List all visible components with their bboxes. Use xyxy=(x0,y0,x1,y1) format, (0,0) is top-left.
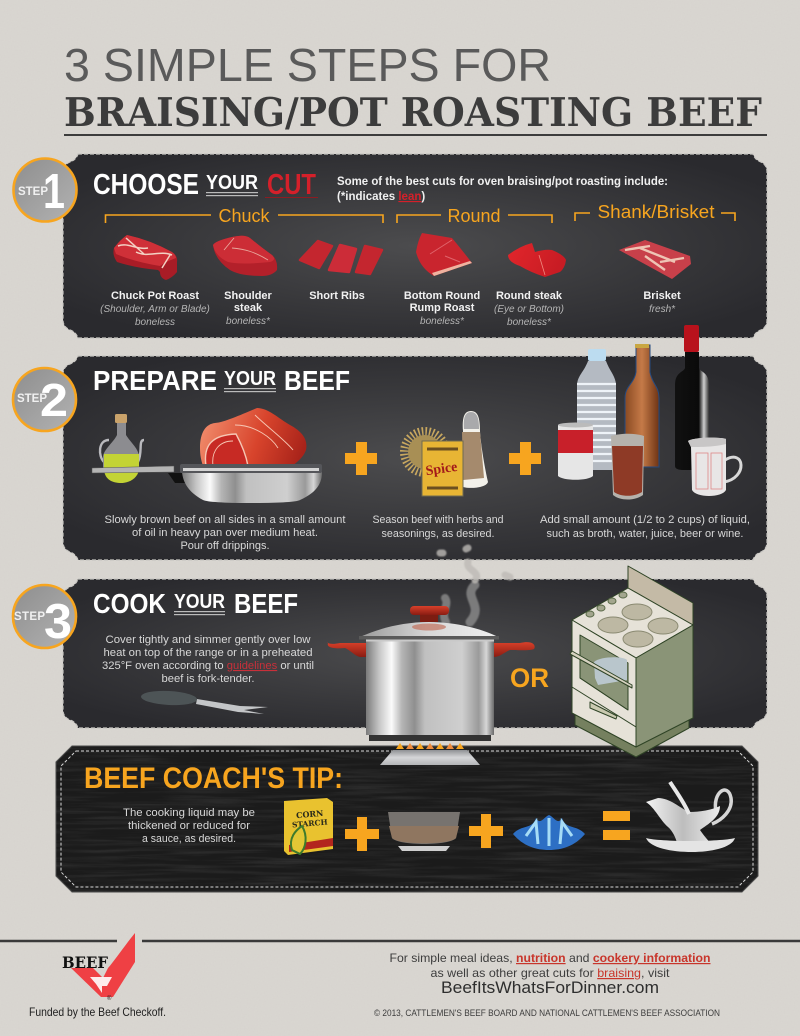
icon: gravy boat xyxy=(646,782,735,852)
icon: spice tin and shaker xyxy=(405,411,488,496)
cut labels: Chuck Pot Roast xyxy=(111,290,199,302)
icon: corn starch box: CORN xyxy=(296,808,324,820)
icon: roast in skillet xyxy=(92,408,322,503)
text: add liquid xyxy=(540,514,750,540)
cut labels: Shoulder xyxy=(224,290,273,302)
bracket: round xyxy=(397,206,552,226)
icon: stock pot on burner xyxy=(327,606,535,765)
text: brown beef: Pour off drippings. xyxy=(180,540,270,552)
footer text: © 2013, CATTLEMEN'S BEEF BOARD AND NATIONAL CATTLEMEN'S BEEF ASSOCIATION xyxy=(374,1008,720,1019)
bracket: chuck xyxy=(106,206,383,226)
plus sign xyxy=(345,817,379,851)
cut labels: boneless* xyxy=(507,317,552,328)
bracket: chuck: Chuck xyxy=(218,206,271,226)
icon: bowl of liquid xyxy=(388,812,460,851)
cut labels xyxy=(100,290,681,328)
logo: beef check: BEEF xyxy=(62,953,109,972)
heading: cook your beef xyxy=(93,588,298,619)
footer text: BeefItsWhatsForDinner.com xyxy=(441,979,659,997)
panel: step 1 choose your cut xyxy=(14,154,767,338)
icon: beer bottle xyxy=(625,344,659,467)
heading: prepare your beef: YOUR xyxy=(224,368,276,390)
icon: olive oil bottle xyxy=(100,414,144,483)
panel: step 2 prepare your beef xyxy=(13,325,767,560)
meat: round steak xyxy=(508,243,566,277)
icon: corn starch box: STARCH xyxy=(292,817,328,830)
cut labels: Short Ribs xyxy=(309,290,365,302)
cut labels: boneless* xyxy=(226,316,271,327)
cut labels: Round steak xyxy=(496,290,563,302)
heading: prepare your beef xyxy=(93,365,350,396)
heading: cook your beef: YOUR xyxy=(174,591,225,613)
text: add liquid: such as broth, water, juice, beer or wine. xyxy=(546,528,744,540)
bracket: shank/brisket xyxy=(575,202,735,222)
footer text: For simple meal ideas, nutrition and cookery information xyxy=(390,951,710,965)
text: cooking liquid: The cooking liquid may be xyxy=(123,807,255,819)
logo: beef check: ® xyxy=(107,995,112,1002)
title: BRAISING/POT ROASTING BEEF xyxy=(64,90,762,136)
step 2 badge: 2 xyxy=(40,374,68,426)
cut labels: boneless* xyxy=(420,316,465,327)
text: brown beef xyxy=(104,514,346,552)
meat: brisket xyxy=(619,240,691,279)
cut labels: (Eye or Bottom) xyxy=(494,304,564,315)
icon: glass of juice xyxy=(611,434,644,500)
footer text xyxy=(374,951,720,1019)
text: or: OR xyxy=(510,663,549,693)
icon: wine bottle xyxy=(675,325,709,470)
cut labels: Rump Roast xyxy=(410,302,475,314)
logo: beef check xyxy=(62,933,135,1002)
heading: choose your cut xyxy=(93,169,318,201)
step 2 badge xyxy=(13,368,76,431)
text: brown beef: Slowly brown beef on all sides in a small amount xyxy=(104,514,346,526)
meat: chuck pot roast xyxy=(113,235,177,280)
step 3 badge xyxy=(13,585,76,649)
heading: cook your beef: BEEF xyxy=(234,588,298,619)
text: brown beef: of oil in heavy pan over medium heat. xyxy=(132,527,318,539)
icon: spice tin and shaker: Spice xyxy=(425,460,458,479)
title xyxy=(64,39,767,136)
steam xyxy=(440,548,510,622)
icon: soup can xyxy=(558,422,593,480)
step 1 badge: 1 xyxy=(43,165,65,219)
heading: choose your cut: CHOOSE xyxy=(93,169,199,201)
icon: measuring cup xyxy=(688,438,741,496)
title: 3 SIMPLE STEPS FOR xyxy=(64,39,551,91)
equals sign xyxy=(603,811,630,840)
panel: step 3 cook your beef xyxy=(13,548,767,765)
text: simmer instructions: heat on top of the range or in a preheated xyxy=(104,647,312,659)
meat: shoulder steak xyxy=(213,236,277,276)
plus sign xyxy=(345,442,377,475)
text: season beef xyxy=(372,514,504,540)
text: cooking liquid xyxy=(123,807,255,845)
icon: gas flame xyxy=(513,815,585,850)
text: cooking liquid: a sauce, as desired. xyxy=(142,833,236,845)
meat: short ribs xyxy=(300,241,382,274)
plus sign xyxy=(509,442,541,475)
cut labels: steak xyxy=(234,302,263,314)
step 2 badge: STEP xyxy=(17,393,47,405)
bracket: round: Round xyxy=(447,206,501,226)
plus sign xyxy=(469,814,503,848)
footer rule xyxy=(0,940,800,942)
intro text: Some of the best cuts for oven braising/pot roasting include: xyxy=(337,176,668,188)
step 3 badge: STEP xyxy=(14,611,45,623)
text: simmer instructions: beef is fork-tender. xyxy=(162,673,254,685)
heading: cook your beef: COOK xyxy=(93,588,166,619)
step 1 badge xyxy=(14,158,76,222)
step 3 badge: 3 xyxy=(44,595,72,649)
text: simmer instructions: Cover tightly and simmer gently over low xyxy=(106,634,311,646)
footer text: as well as other great cuts for braising, visit xyxy=(430,966,670,980)
icon: corn starch box xyxy=(284,798,333,855)
heading: choose your cut: CUT xyxy=(267,169,316,201)
text: funded by: Funded by the Beef Checkoff. xyxy=(29,1005,166,1019)
lean note: (*indicates lean) xyxy=(337,191,425,203)
step 1 badge: STEP xyxy=(18,186,48,198)
panel: beef coach's tip xyxy=(56,746,758,892)
icon: oven range xyxy=(570,566,693,757)
bracket: shank/brisket: Shank/Brisket xyxy=(598,202,714,222)
heading: choose your cut: YOUR xyxy=(206,172,258,194)
text: cooking liquid: thickened or reduced for xyxy=(128,820,250,832)
heading: prepare your beef: PREPARE xyxy=(93,365,217,396)
heading: prepare your beef: BEEF xyxy=(284,365,350,396)
cut labels: boneless xyxy=(135,317,175,328)
cut labels: fresh* xyxy=(649,304,676,315)
text: season beef: Season beef with herbs and xyxy=(372,514,504,526)
text: add liquid: Add small amount (1/2 to 2 cups) of liquid, xyxy=(540,514,750,526)
cut labels: Brisket xyxy=(643,290,681,302)
cut labels: (Shoulder, Arm or Blade) xyxy=(100,304,210,315)
cut labels: Bottom Round xyxy=(404,290,480,302)
icon: meat fork xyxy=(141,690,268,714)
meat: bottom round rump roast xyxy=(416,233,472,276)
text: simmer instructions: 325°F oven according to guidelines or until xyxy=(102,660,314,672)
icon: water bottle xyxy=(577,349,616,470)
heading: beef coach's tip: BEEF COACH'S TIP: xyxy=(84,762,343,795)
text: season beef: seasonings, as desired. xyxy=(382,528,494,540)
text: simmer instructions xyxy=(102,634,314,685)
